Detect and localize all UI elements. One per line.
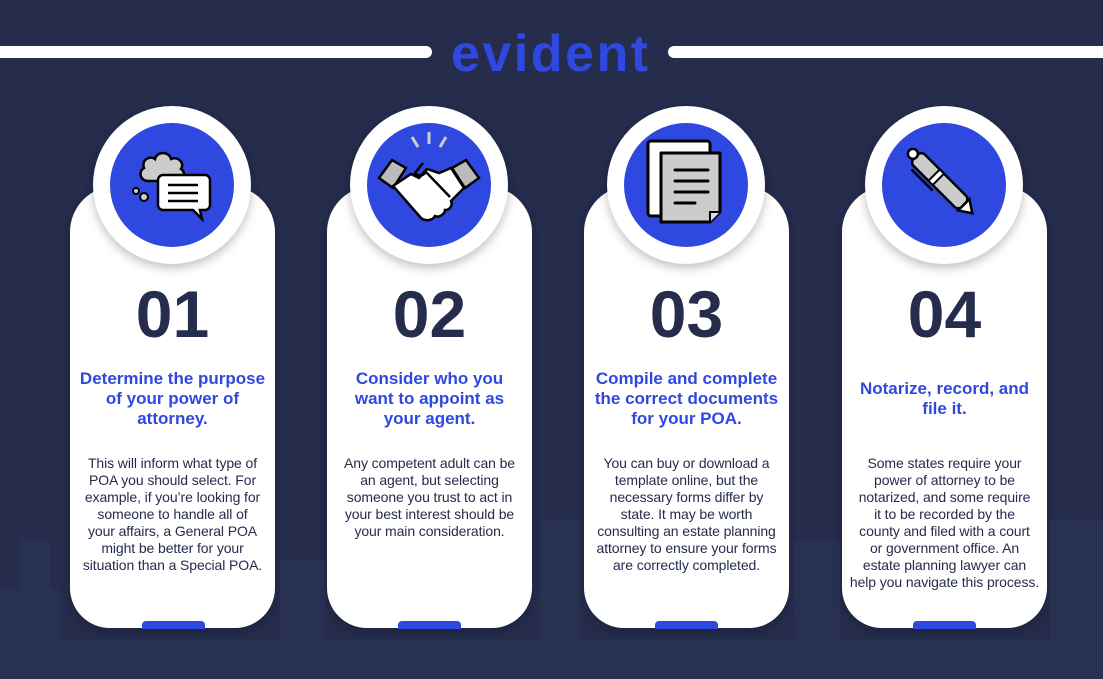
body 4: county and filed with a court	[859, 523, 1030, 539]
title 2: Consider who you	[356, 369, 503, 388]
body 2	[344, 455, 515, 539]
body 1: This will inform what type of	[88, 455, 257, 471]
body 1: your affairs, a General POA	[88, 523, 257, 539]
body 4: power of attorney to be	[874, 472, 1015, 488]
body 3: are correctly completed.	[613, 557, 760, 573]
logo: evident	[451, 25, 651, 83]
body 4: estate planning lawyer can	[863, 557, 1026, 573]
body 3: state. It may be worth	[621, 506, 752, 522]
title 1: attorney.	[137, 409, 208, 428]
icon circle 2: handshake	[350, 106, 508, 264]
body 1: might be better for your	[101, 540, 244, 556]
title 2: want to appoint as	[355, 389, 504, 408]
tab 2	[398, 621, 461, 629]
body 2: someone you trust to act in	[347, 489, 512, 505]
body 4: notarized, and some require	[859, 489, 1030, 505]
body 2: an agent, but selecting	[360, 472, 499, 488]
tab 4	[913, 621, 976, 629]
title 1: of your power of	[106, 389, 239, 408]
body 3: consulting an estate planning	[597, 523, 776, 539]
body 4: or government office. An	[870, 540, 1019, 556]
body 2: your main consideration.	[354, 523, 505, 539]
title 4: Notarize, record, and	[860, 379, 1029, 398]
number 04: 04	[908, 277, 981, 351]
number 03: 03	[650, 277, 723, 351]
title 3	[595, 369, 778, 428]
title 2: your agent.	[384, 409, 475, 428]
body 4: Some states require your	[867, 455, 1022, 471]
card 3	[584, 186, 789, 628]
body 4	[850, 455, 1039, 590]
header line right	[668, 46, 1103, 58]
body 1: someone to handle all of	[97, 506, 248, 522]
title 1	[80, 369, 265, 428]
body 3: You can buy or download a	[604, 455, 769, 471]
title 4	[860, 379, 1029, 418]
body 1: example, if you’re looking for	[85, 489, 260, 505]
icon circle 1: thought/chat	[93, 106, 251, 264]
header line left	[0, 46, 432, 58]
body 4: help you navigate this process.	[850, 574, 1039, 590]
icon circle 3: documents	[607, 106, 765, 264]
body 1	[83, 455, 262, 573]
body 3: necessary forms differ by	[610, 489, 763, 505]
number 01: 01	[136, 277, 209, 351]
body 2: Any competent adult can be	[344, 455, 515, 471]
body 2: your best interest should be	[345, 506, 514, 522]
tab 1	[142, 621, 205, 629]
body 4: it to be recorded by the	[874, 506, 1015, 522]
card 1	[70, 186, 275, 628]
title 3: the correct documents	[595, 389, 778, 408]
body 3: template online, but the	[615, 472, 758, 488]
body 1: situation than a Special POA.	[83, 557, 262, 573]
title 1: Determine the purpose	[80, 369, 265, 388]
title 2	[354, 369, 504, 428]
number 02: 02	[393, 277, 466, 351]
body 3: attorney to ensure your forms	[597, 540, 776, 556]
icon circle 4: pen	[865, 106, 1023, 264]
body 1: POA you should select. For	[89, 472, 256, 488]
tab 3	[655, 621, 718, 629]
title 3: for your POA.	[631, 409, 742, 428]
card 2	[327, 186, 532, 628]
title 3: Compile and complete	[596, 369, 777, 388]
card 4	[842, 186, 1047, 628]
body 3	[597, 455, 776, 573]
title 4: file it.	[922, 399, 967, 418]
